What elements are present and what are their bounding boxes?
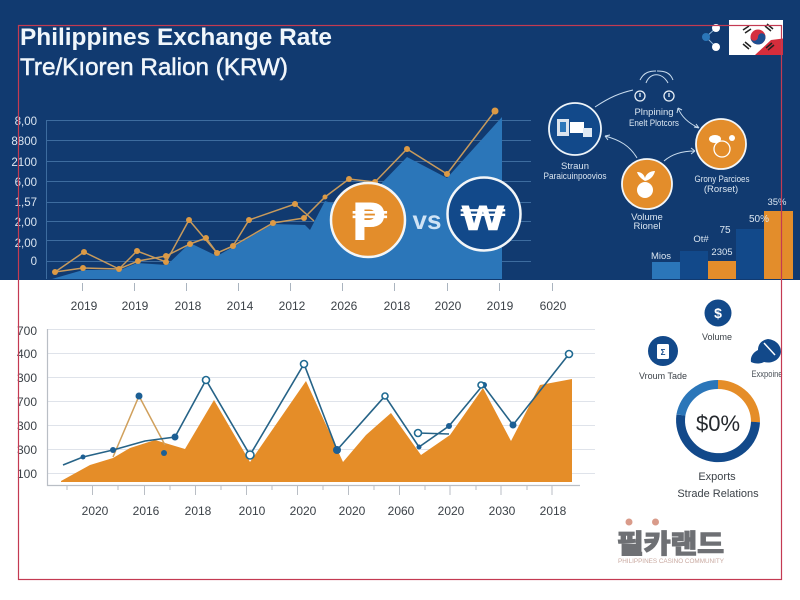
top chart orange lines — [55, 111, 495, 272]
top chart x-axis labels: 2014 — [227, 299, 254, 313]
top chart y-axis labels: 6,00 — [15, 177, 37, 189]
bottom chart markers — [80, 382, 516, 460]
icon: volume dollar: Volume — [702, 332, 732, 342]
top chart x-axis labels: 2012 — [279, 299, 306, 313]
bottom chart x-axis labels: 2010 — [239, 504, 266, 518]
bar labels: Ot# — [693, 234, 709, 245]
bottom chart y-axis labels — [17, 324, 37, 481]
bottom chart y-axis labels: 400 — [17, 347, 37, 361]
icon: volume trade: Σ — [661, 348, 666, 357]
node: Volume: Rionel — [634, 221, 660, 232]
top chart y-axis labels: 2,00 — [15, 238, 37, 250]
logo: PHILIPPINES CASINO COMMUNITY — [618, 558, 725, 565]
top chart x-axis labels: 2019 — [71, 299, 98, 313]
top chart y-axis labels: 1,57 — [15, 197, 37, 209]
chart: donut: Strade Relations — [677, 488, 759, 500]
top chart x-axis labels: 2018 — [175, 299, 202, 313]
chart: top exchange rate area chart — [11, 108, 531, 279]
bar labels: 75 — [719, 225, 731, 236]
bottom chart blue line — [63, 354, 569, 465]
bottom chart x-axis labels — [82, 504, 567, 518]
top chart y-axis labels: 8800 — [11, 136, 37, 148]
title — [20, 24, 332, 81]
bar labels: Mios — [651, 251, 671, 262]
bottom chart x-axis labels: 2060 — [388, 504, 415, 518]
chart: bottom trade volume area chart — [17, 324, 595, 518]
bar chart: small bars — [651, 197, 793, 279]
icon: volume dollar: $ — [714, 305, 722, 321]
title: Tre/Kıoren Ralion (KRW) — [20, 54, 288, 81]
logo — [617, 518, 725, 565]
bar labels: 35% — [767, 197, 787, 208]
node: Stream: Straun — [561, 161, 589, 172]
icon: exports handshake — [751, 339, 782, 379]
bottom chart y-axis labels: 300 — [17, 419, 37, 433]
icon: won coin — [448, 178, 520, 250]
diagram arrows — [595, 71, 699, 161]
node: Volume — [622, 159, 672, 232]
icon: peso coin — [331, 183, 405, 257]
icon: Korean flag — [729, 20, 783, 55]
chart: donut — [677, 384, 759, 500]
icon: peso coin: ₱ — [351, 193, 388, 253]
bottom chart y-axis labels: 300 — [17, 443, 37, 457]
bottom chart x-axis labels: 2016 — [133, 504, 160, 518]
top chart x-axis ticks — [82, 283, 552, 291]
node: Volume: Volume — [631, 212, 663, 223]
logo: 필카랜드 — [617, 529, 724, 559]
bottom chart x-axis labels: 2020 — [290, 504, 317, 518]
chart: donut: Exports — [698, 471, 736, 483]
icon: volume trade: Vroum Tade — [639, 371, 687, 381]
top chart x-axis labels: 2026 — [331, 299, 358, 313]
node: Stream: Paraicuinpoovios — [544, 171, 607, 182]
node: Growth — [694, 119, 750, 195]
bottom chart x-axis labels: 2020 — [438, 504, 465, 518]
top chart x-axis labels: 2018 — [384, 299, 411, 313]
title: Philippines Exchange Rate — [20, 24, 332, 51]
label: platform: Enelt Plotcors — [629, 118, 679, 129]
bottom chart y-axis labels: 100 — [17, 467, 37, 481]
label: platform: Plnpining — [634, 107, 674, 118]
chart: donut: $0% — [696, 411, 740, 436]
label: vs: vs — [413, 205, 441, 235]
node: Growth: Grony Parcioes — [694, 174, 750, 185]
top chart y-axis labels: 2100 — [11, 157, 37, 169]
icon: exports handshake: Exxpoine — [752, 369, 782, 379]
small node icons — [635, 91, 674, 101]
diagram: trade relations — [544, 71, 750, 232]
bar labels: 50% — [749, 214, 769, 225]
top chart x-axis labels: 6020 — [540, 299, 567, 313]
bottom chart y-axis labels: 300 — [17, 371, 37, 385]
icon: won coin: ₩ — [460, 199, 506, 238]
bottom chart x-axis labels: 2018 — [540, 504, 567, 518]
bottom chart orange line — [113, 396, 165, 457]
label: platform — [629, 107, 679, 129]
top chart y-axis labels: 2,00 — [15, 217, 37, 229]
top chart y-axis labels: 0 — [31, 256, 37, 268]
bottom chart x-axis labels: 2030 — [489, 504, 516, 518]
bar labels — [651, 197, 787, 262]
bottom chart x-axis labels: 2018 — [185, 504, 212, 518]
bottom chart y-axis labels: 700 — [17, 395, 37, 409]
top chart y-axis labels: 8,00 — [15, 116, 37, 128]
bar labels: 2305 — [711, 247, 733, 258]
panel: dark header background — [0, 0, 800, 280]
bottom chart x-axis labels: 2020 — [82, 504, 109, 518]
top chart x-axis labels: 2019 — [122, 299, 149, 313]
icon: volume dollar — [702, 300, 732, 342]
top chart blue area — [52, 117, 502, 279]
bottom chart y-axis labels: 700 — [17, 324, 37, 338]
top chart markers — [52, 108, 498, 275]
node: Stream — [544, 103, 607, 182]
top chart y-axis labels — [11, 116, 37, 268]
top chart x-axis labels — [71, 299, 567, 313]
icon: volume trade — [639, 336, 687, 381]
node: Growth: (Rorset) — [704, 184, 738, 195]
bottom chart orange area — [61, 379, 572, 482]
top chart x-axis labels: 2020 — [435, 299, 462, 313]
icon: share nodes — [702, 24, 720, 51]
top chart x-axis labels: 2019 — [487, 299, 514, 313]
bottom chart x-axis labels: 2020 — [339, 504, 366, 518]
